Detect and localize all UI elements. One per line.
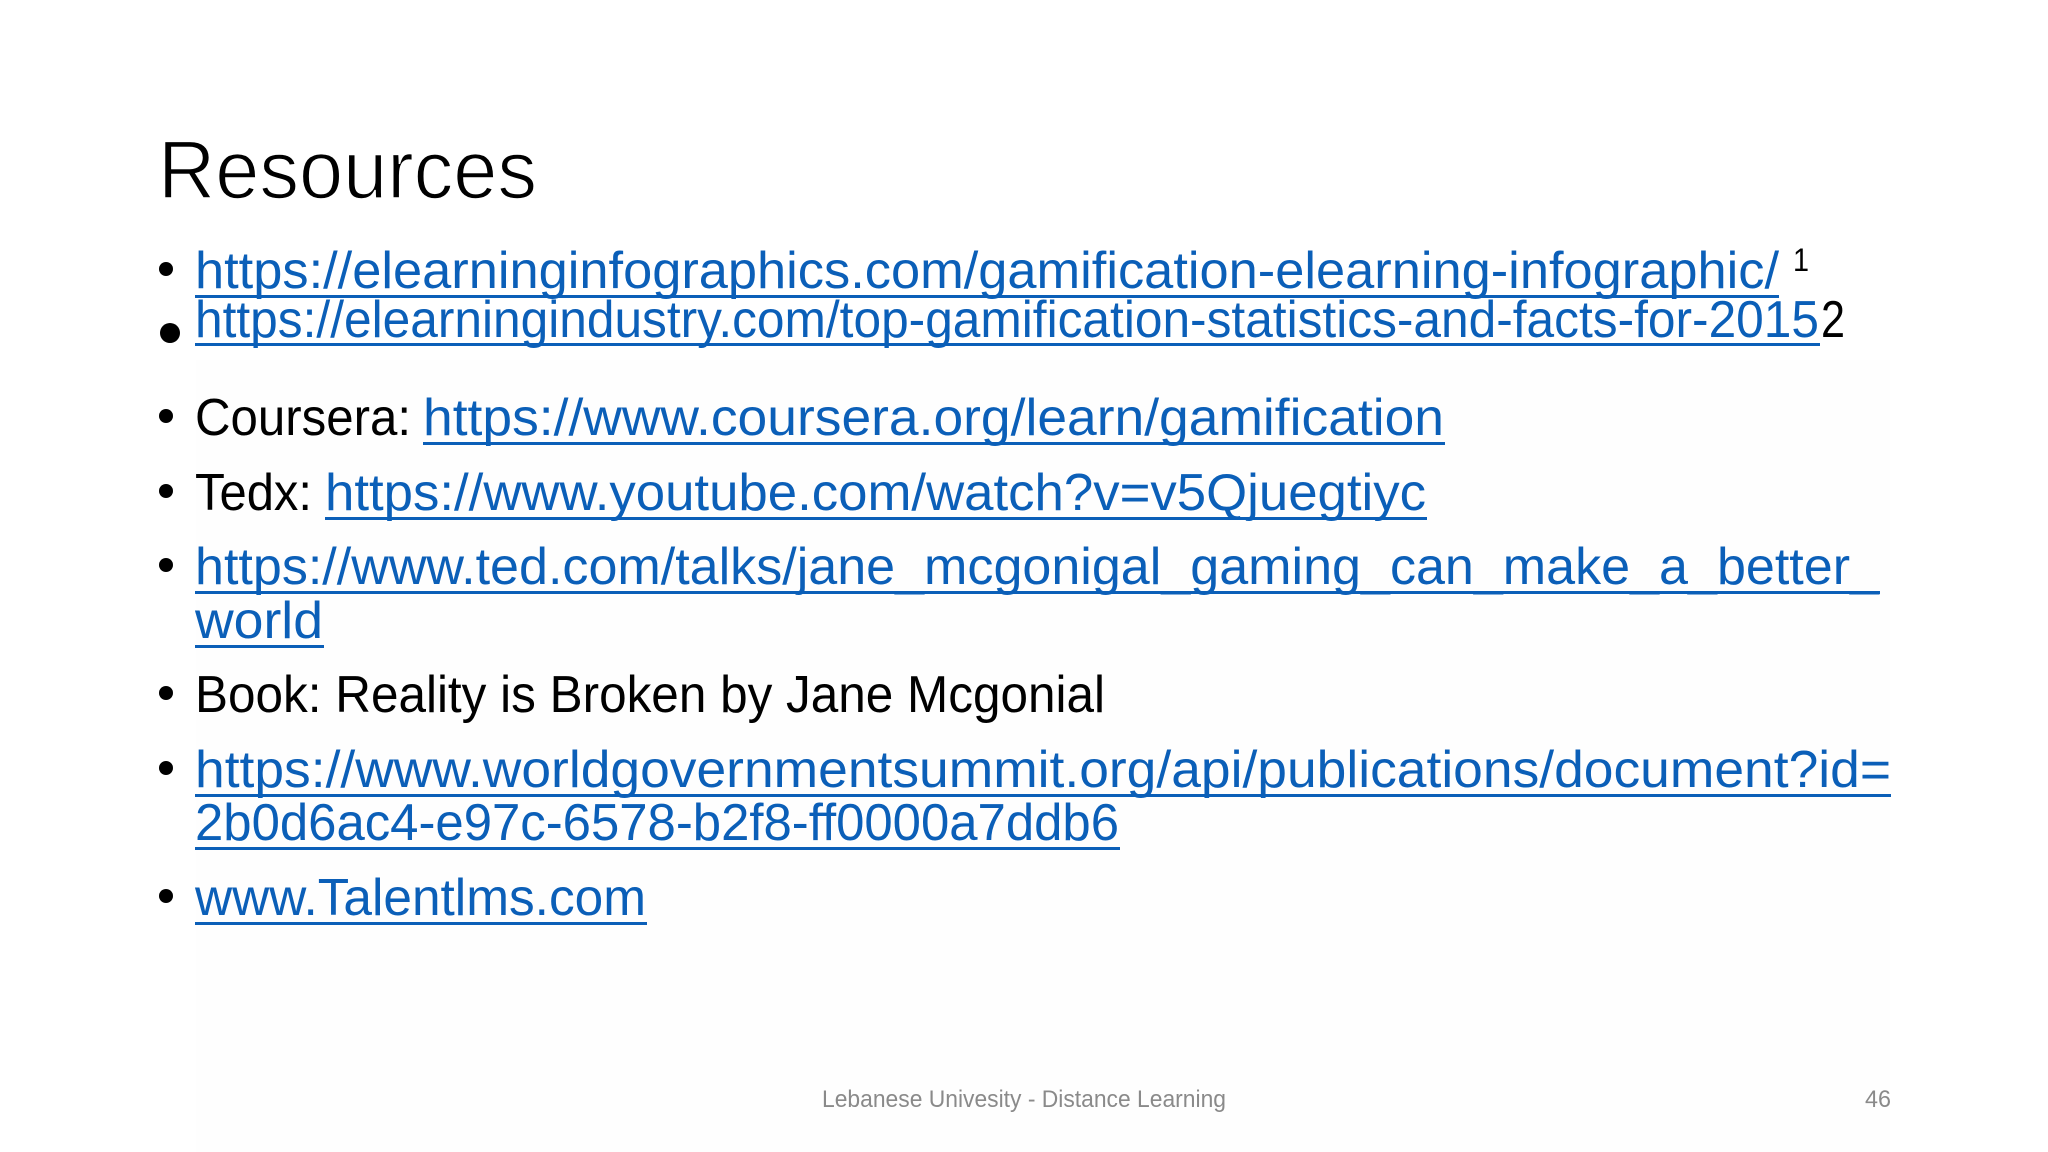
item: Tedx: Tedx:: [195, 464, 312, 522]
title: Resources: [158, 123, 537, 216]
item: World Government Summit link: 2b0d6ac4-e97c-6578-b2f8-ff0000a7ddb6: [195, 794, 1119, 852]
item: elearningindustry link with reference 2: https://elearningindustry.com/top-gamification-statistics-and-facts-for-2015: [195, 291, 1819, 349]
item: World Government Summit link: [159, 741, 1891, 852]
item: World Government Summit link: https://www.worldgovernmentsummit.org/api/publications/document?id=: [195, 741, 1891, 799]
item: elearninginfographics link with reference 1: https://elearninginfographics.com/gamification-elearning-infographic/: [195, 242, 1780, 300]
item: elearningindustry link with reference 2: 2: [1821, 291, 1845, 349]
item: Coursera: Coursera:: [195, 389, 411, 447]
item: TalentLMS link: www.Talentlms.com: [194, 869, 646, 927]
item: TED talk link: https://www.ted.com/talks/jane_mcgonigal_gaming_can_make_a_better_: [195, 538, 1880, 596]
resource list: [159, 242, 1891, 927]
page number: 46: [1865, 1086, 1891, 1113]
item: book: Book: Reality is Broken by Jane Mcgonial: [195, 666, 1105, 724]
item: Tedx: https://www.youtube.com/watch?v=v5Qjuegtiyc: [325, 464, 1426, 522]
item: TED talk link: world: [194, 592, 323, 650]
item: Coursera: https://www.coursera.org/learn/gamification: [423, 389, 1444, 447]
item: TED talk link: [159, 538, 1880, 650]
footer text: Lebanese Univesity - Distance Learning: [822, 1086, 1226, 1113]
item: elearninginfographics link with reference 1: 1: [1793, 242, 1809, 278]
